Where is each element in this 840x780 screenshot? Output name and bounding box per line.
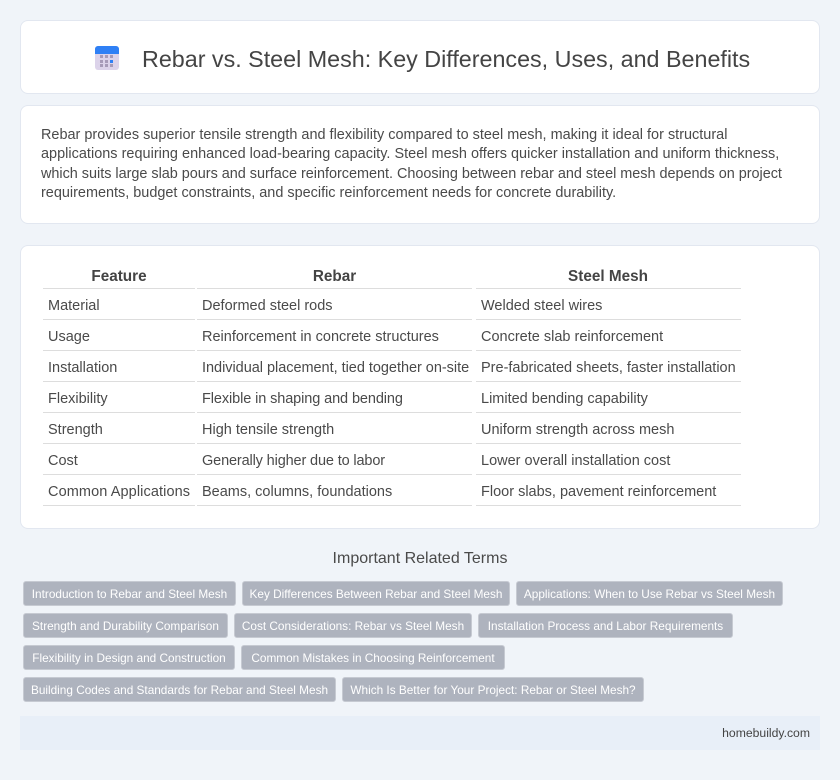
row: strength: Uniform strength across mesh xyxy=(481,422,674,438)
tag xyxy=(23,581,236,606)
table header: Rebar xyxy=(313,268,356,285)
tag xyxy=(23,645,235,670)
row: flexibility: Flexible in shaping and bending xyxy=(202,391,403,407)
row: installation xyxy=(48,360,736,376)
tag xyxy=(242,581,510,606)
row: material: Material xyxy=(48,298,100,314)
row: strength xyxy=(48,422,674,438)
row: cost: Lower overall installation cost xyxy=(481,453,670,469)
row: cost: Generally higher due to labor xyxy=(202,453,385,469)
tag xyxy=(516,581,783,606)
icon: calendar xyxy=(95,46,119,70)
tag: Flexibility in Design and Construction xyxy=(32,651,226,665)
tag: Which Is Better for Your Project: Rebar or Steel Mesh? xyxy=(350,683,636,697)
footer xyxy=(20,716,820,750)
title: Rebar vs. Steel Mesh: Key Differences, Uses, and Benefits xyxy=(142,46,750,72)
row: flexibility xyxy=(48,391,648,407)
row: usage: Reinforcement in concrete structures xyxy=(202,329,439,345)
tag xyxy=(234,613,472,638)
row: installation: Installation xyxy=(48,360,117,376)
tag: Key Differences Between Rebar and Steel Mesh xyxy=(250,587,502,601)
row: common applications xyxy=(48,484,716,500)
table header: Steel Mesh xyxy=(568,268,648,285)
row: installation: Individual placement, tied together on-site xyxy=(202,360,469,376)
row: common applications: Floor slabs, pavement reinforcement xyxy=(481,484,716,500)
tag xyxy=(241,645,505,670)
row: common applications: Common Applications xyxy=(48,484,190,500)
row: usage xyxy=(48,329,664,345)
heading: related terms: Important Related Terms xyxy=(333,550,507,567)
summary text: Rebar provides superior tensile strength and flexibility compared to steel mesh, making it ideal for structural xyxy=(41,127,727,143)
row: material xyxy=(48,298,602,314)
row: material: Welded steel wires xyxy=(481,298,602,314)
row: common applications: Beams, columns, foundations xyxy=(202,484,392,500)
row: cost: Cost xyxy=(48,453,78,469)
summary text: which suits large slab pours and surface reinforcement. Choosing between rebar and steel mesh depends on project xyxy=(41,166,782,182)
row: usage: Concrete slab reinforcement xyxy=(481,329,663,345)
header panel xyxy=(20,20,820,94)
footer source: homebuildy.com xyxy=(722,726,810,740)
summary text: applications requiring enhanced load-bearing capacity. Steel mesh offers quicker installation and uniform thickness, xyxy=(41,146,779,162)
tag: Cost Considerations: Rebar vs Steel Mesh xyxy=(242,619,464,633)
tag xyxy=(23,677,336,702)
panel: comparison table xyxy=(20,245,820,529)
row: cost xyxy=(48,453,670,469)
tag xyxy=(342,677,644,702)
tag: Introduction to Rebar and Steel Mesh xyxy=(32,587,227,601)
table header xyxy=(91,268,648,285)
panel: summary xyxy=(20,105,820,224)
row: flexibility: Limited bending capability xyxy=(481,391,648,407)
table header: Feature xyxy=(91,268,147,285)
tags: related terms xyxy=(23,581,783,702)
summary text xyxy=(41,127,782,201)
row: material: Deformed steel rods xyxy=(202,298,333,314)
row: strength: High tensile strength xyxy=(202,422,334,438)
tag: Applications: When to Use Rebar vs Steel Mesh xyxy=(524,587,775,601)
tag xyxy=(23,613,228,638)
row: flexibility: Flexibility xyxy=(48,391,108,407)
summary text: requirements, budget constraints, and specific reinforcement needs for concrete durability. xyxy=(41,185,616,201)
row: installation: Pre-fabricated sheets, faster installation xyxy=(481,360,736,376)
tag: Building Codes and Standards for Rebar and Steel Mesh xyxy=(31,683,328,697)
tag: Installation Process and Labor Requirements xyxy=(488,619,723,633)
row: usage: Usage xyxy=(48,329,90,345)
tag: Common Mistakes in Choosing Reinforcement xyxy=(251,651,495,665)
tag xyxy=(478,613,733,638)
row: strength: Strength xyxy=(48,422,103,438)
tag: Strength and Durability Comparison xyxy=(32,619,219,633)
